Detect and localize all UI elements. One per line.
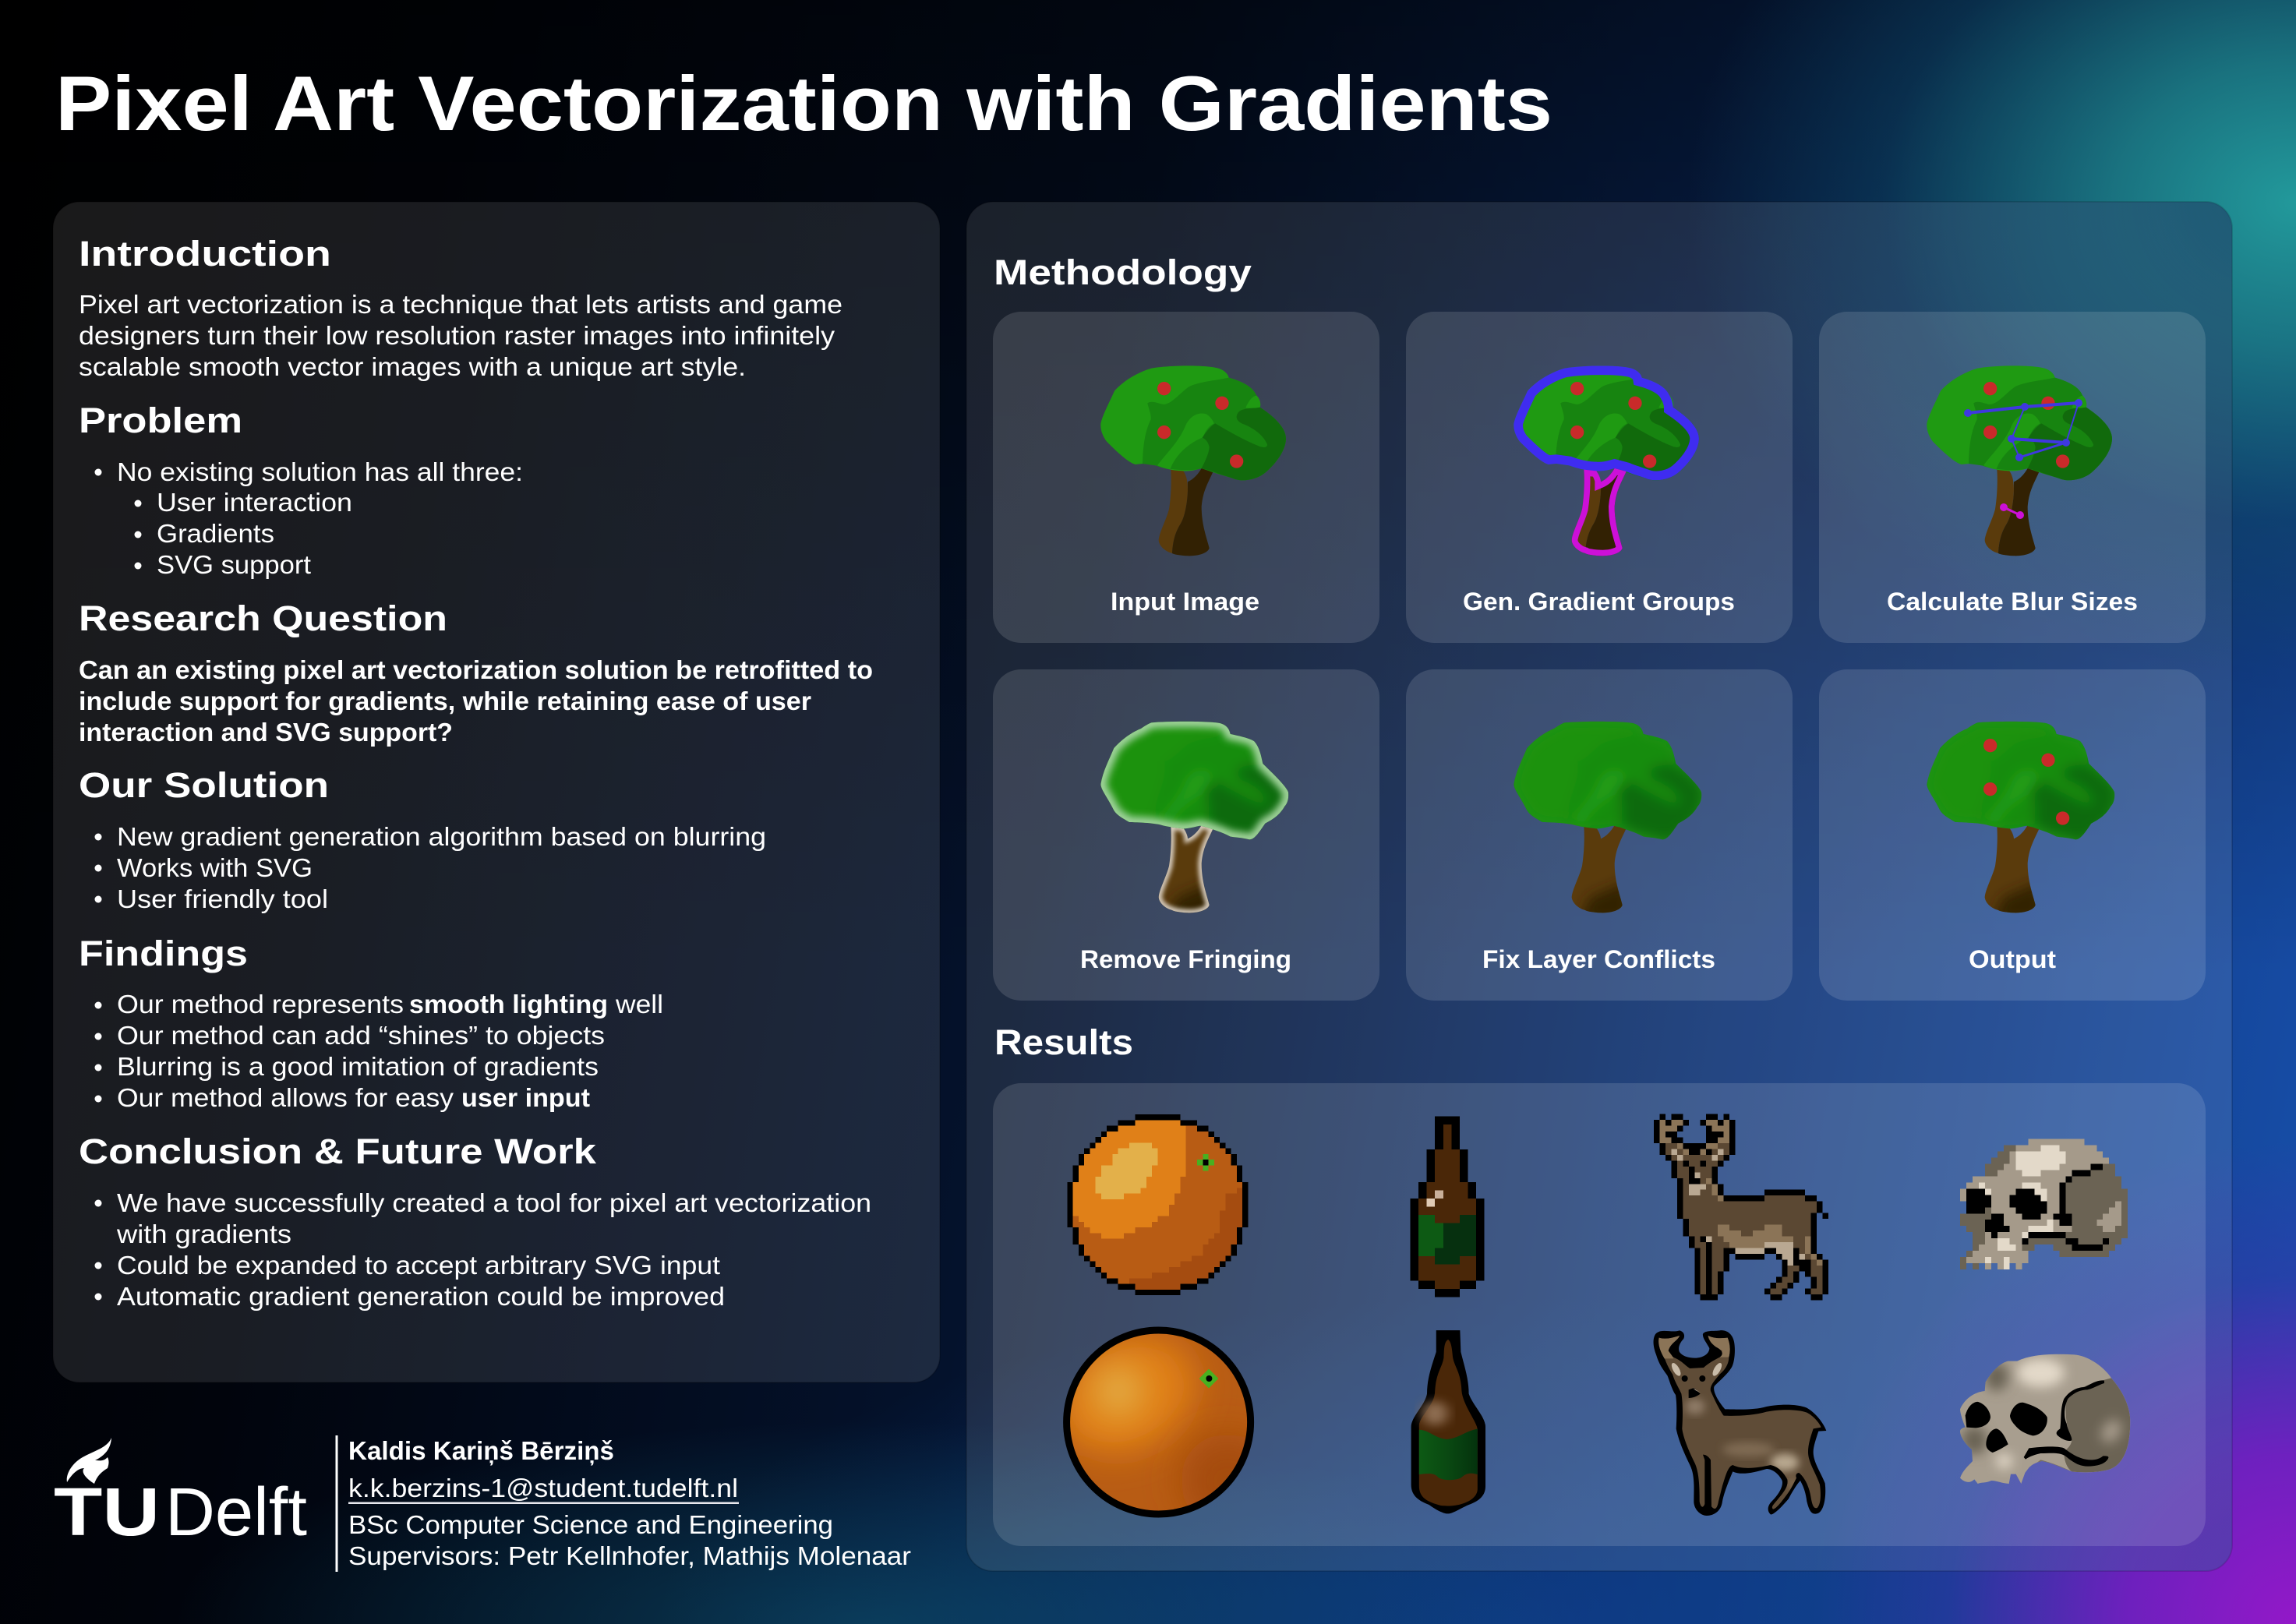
- heading: introduction: Introduction: [79, 234, 331, 274]
- author details: Supervisors: Petr Kellnhofer, Mathijs Molenaar: [348, 1541, 911, 1570]
- text block: introduction: scalable smooth vector images with a unique art style.: [79, 353, 746, 382]
- heading: results: Results: [994, 1022, 1133, 1062]
- heading: conclusion and future work: Conclusion & Future Work: [79, 1132, 597, 1171]
- icon: tree output with apples: [1927, 722, 2118, 920]
- bullet list: problem: User interaction: [157, 489, 352, 517]
- bullet list: findings: [95, 990, 663, 1113]
- card: remove fringing: [993, 669, 1379, 1001]
- logo: TU Delft: TU: [54, 1474, 160, 1550]
- text block: research question: interaction and SVG support?: [79, 718, 453, 747]
- bullet list: problem: No existing solution has all three:: [117, 458, 523, 487]
- bullet list: conclusion: Could be expanded to accept arbitrary SVG input: [117, 1252, 721, 1280]
- heading: our solution: Our Solution: [79, 765, 329, 805]
- panel: left text column: [53, 202, 940, 1382]
- section: introduction: [79, 234, 842, 382]
- icon: tree smooth: [1514, 722, 1704, 920]
- author details: BSc Computer Science and Engineering: [348, 1510, 833, 1539]
- label: Output: [1969, 945, 2056, 973]
- text block: research question: Can an existing pixel art vectorization solution be retrofitted to: [79, 656, 873, 685]
- card: fix layer conflicts: [1406, 669, 1793, 1001]
- bullet list: problem: Gradients: [157, 520, 274, 549]
- sprite: pixel skull: [1960, 1142, 2128, 1266]
- logo: TU Delft: Delft: [165, 1474, 307, 1550]
- bullet list: conclusion: We have successfully created a tool for pixel art vectorization: [117, 1189, 871, 1218]
- icon: tree with blur measurement lines: [1927, 365, 2112, 556]
- author details: Kaldis Kariņš Bērziņš: [348, 1436, 614, 1465]
- bullet list: our solution: User friendly tool: [117, 885, 328, 914]
- icon: tree input: [1100, 365, 1286, 556]
- text block: introduction: designers turn their low resolution raster images into infinitely: [79, 322, 835, 351]
- logo: TU Delft: [54, 1438, 307, 1550]
- bullet list: findings: Our method can add “shines” to objects: [117, 1022, 605, 1050]
- label: Remove Fringing: [1080, 945, 1291, 973]
- bullet list: conclusion: [95, 1189, 871, 1312]
- bullet list: our solution: New gradient generation algorithm based on blurring: [117, 823, 766, 852]
- icon: tree with gradient group outlines: [1514, 365, 1699, 556]
- card: generate gradient groups: [1406, 312, 1793, 643]
- icon: tree with fringes: [1100, 722, 1291, 920]
- author details: k.k.berzins-1@student.tudelft.nl: [348, 1474, 738, 1502]
- card: calculate blur sizes: [1819, 312, 2206, 643]
- bullet list: findings: Our method represents: [117, 990, 404, 1019]
- section: findings: [79, 934, 663, 1113]
- bullet list: conclusion: with gradients: [116, 1220, 291, 1249]
- bullet list: findings: well: [615, 990, 663, 1019]
- vector: skull: [1958, 1350, 2134, 1486]
- author details: [348, 1436, 911, 1570]
- label: Calculate Blur Sizes: [1887, 588, 2138, 616]
- panel: methodology and results: [966, 202, 2232, 1571]
- bullet list: findings: user input: [461, 1084, 590, 1113]
- bullet list: our solution: Works with SVG: [117, 854, 313, 883]
- heading: methodology: Methodology: [994, 252, 1252, 292]
- bullet list: problem: [95, 458, 523, 580]
- sprite: pixel deer: [1654, 1117, 1828, 1297]
- label: Fix Layer Conflicts: [1482, 945, 1715, 973]
- text block: introduction: [79, 291, 842, 382]
- title: Pixel Art Vectorization with Gradients: [55, 60, 1552, 147]
- vector: orange: [1037, 1314, 1274, 1527]
- section: problem: [79, 401, 523, 580]
- card: input image: [993, 312, 1379, 643]
- bullet list: findings: smooth lighting: [409, 990, 608, 1019]
- heading: problem: Problem: [79, 401, 242, 440]
- section: our solution: [79, 765, 766, 914]
- footer: logo and author details: [54, 1435, 911, 1572]
- label: Gen. Gradient Groups: [1463, 588, 1735, 616]
- section: conclusion and future work: [79, 1132, 871, 1312]
- sprite: pixel orange: [1067, 1114, 1248, 1295]
- vector: deer: [1644, 1325, 1832, 1522]
- sprite: pixel bottle: [1411, 1117, 1485, 1297]
- section: research question: [79, 598, 873, 747]
- text block: research question: include support for gradients, while retaining ease of user: [79, 687, 811, 716]
- bullet list: our solution: [95, 823, 766, 914]
- bullet list: problem: SVG support: [157, 551, 312, 580]
- heading: research question: Research Question: [79, 598, 447, 638]
- heading: findings: Findings: [79, 934, 248, 973]
- label: Input Image: [1111, 588, 1259, 616]
- panel: results comparison: [993, 1083, 2206, 1546]
- text block: research question: [79, 656, 873, 747]
- text block: introduction: Pixel art vectorization is a technique that lets artists and game: [79, 291, 842, 320]
- card: output: [1819, 669, 2206, 1001]
- vector: bottle: [1411, 1330, 1485, 1513]
- bullet list: findings: Blurring is a good imitation of gradients: [117, 1053, 599, 1082]
- bullet list: findings: Our method allows for easy: [117, 1084, 454, 1113]
- bullet list: conclusion: Automatic gradient generation could be improved: [117, 1283, 725, 1312]
